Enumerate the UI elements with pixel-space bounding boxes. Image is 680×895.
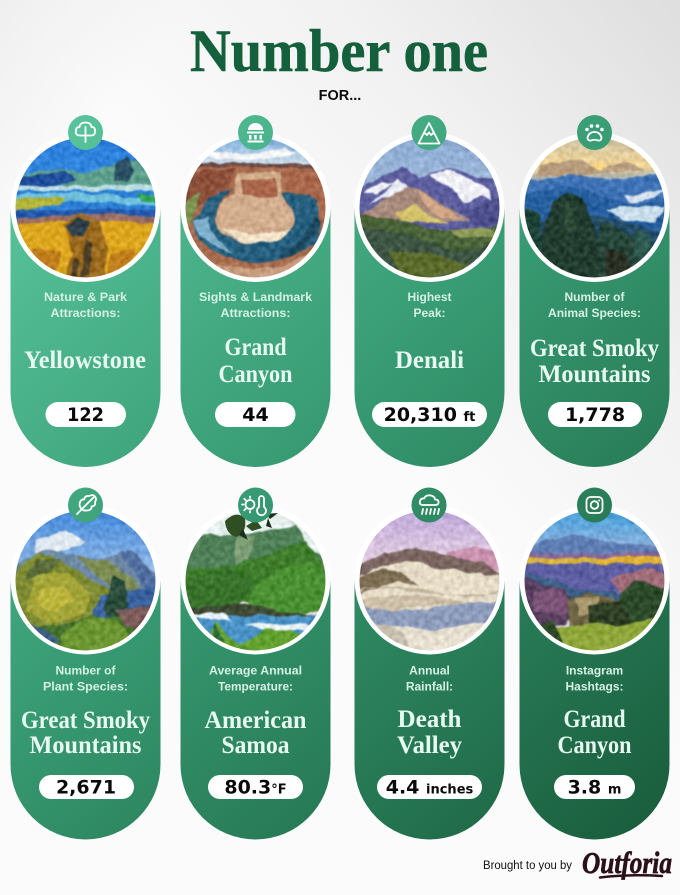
card shape	[10, 207, 161, 467]
value pill	[208, 775, 303, 799]
name: Mountains	[30, 732, 142, 759]
name: Canyon	[218, 361, 293, 388]
icon: landmark	[238, 115, 273, 150]
photo: Grand Canyon north rim	[522, 508, 666, 652]
photo: Smoky Mountains animals	[522, 136, 666, 280]
icon: instagram	[577, 488, 612, 522]
photo: Yellowstone	[14, 136, 158, 280]
label: Peak:	[413, 306, 446, 320]
value pill	[554, 775, 635, 799]
photo: overhanging leaves	[225, 513, 278, 540]
icon: paw	[577, 115, 612, 150]
label: Instagram	[566, 664, 623, 678]
label: Highest	[407, 290, 452, 304]
card shape	[180, 580, 330, 840]
card shape	[354, 580, 504, 840]
value pill	[548, 402, 642, 427]
icon: temperature	[238, 488, 273, 522]
label: Attractions:	[50, 306, 120, 320]
name: Samoa	[222, 732, 290, 759]
label: Annual	[409, 664, 450, 678]
panel: instagram hashtags	[520, 488, 670, 840]
photo ring	[520, 132, 670, 282]
value pill: 44	[242, 404, 269, 426]
value pill: 4.4 inches	[386, 776, 474, 798]
icon: rain cloud	[412, 488, 446, 522]
panel: number of plant species	[10, 488, 161, 840]
value pill	[39, 775, 134, 799]
value pill	[46, 402, 126, 427]
icon: mountain	[412, 115, 446, 150]
name: Yellowstone	[24, 347, 146, 374]
photo ring	[180, 504, 330, 654]
name: Death	[398, 706, 462, 733]
icon: leaf	[68, 488, 103, 522]
value pill: 20,310 ft	[384, 404, 475, 426]
photo: Denali	[358, 136, 502, 280]
card shape	[354, 207, 504, 467]
value pill: 2,671	[56, 776, 116, 798]
label: Attractions:	[220, 306, 290, 320]
photo ring	[520, 504, 670, 654]
name: Grand	[224, 334, 287, 361]
credit text: Brought to you by	[483, 860, 572, 872]
photo ring	[354, 132, 504, 282]
name: Denali	[395, 347, 464, 374]
label: Average Annual	[209, 664, 302, 678]
photo: American Samoa	[184, 508, 328, 652]
label: Rainfall:	[406, 680, 453, 694]
photo: Death Valley	[358, 508, 503, 652]
label: Number of	[564, 290, 626, 304]
label: Sights & Landmark	[199, 290, 312, 304]
name: Canyon	[558, 732, 632, 759]
label: Hashtags:	[565, 680, 624, 694]
name: American	[204, 707, 307, 734]
label: Number of	[56, 664, 117, 678]
panel: annual rainfall	[354, 488, 504, 840]
panel: sights and landmark attractions	[180, 115, 330, 467]
photo ring	[10, 132, 160, 282]
value pill: 1,778	[565, 404, 625, 426]
label: Animal Species:	[548, 306, 641, 320]
label: Plant Species:	[43, 680, 128, 694]
photo ring	[10, 504, 160, 654]
subtitle: FOR...	[319, 88, 361, 104]
panel: nature and park attractions	[10, 115, 161, 467]
card shape	[180, 207, 330, 467]
card shape	[520, 207, 670, 467]
value pill: 122	[67, 404, 104, 426]
name: Great Smoky	[530, 335, 659, 362]
label: Temperature:	[218, 680, 293, 694]
name: Valley	[397, 732, 462, 759]
name: Grand	[564, 706, 626, 733]
name: Mountains	[538, 361, 651, 388]
panel: number of animal species	[520, 115, 670, 467]
value pill: 3.8 m	[568, 776, 621, 798]
value pill: 80.3°F	[224, 776, 287, 798]
value pill	[215, 402, 296, 427]
panel: highest peak	[354, 115, 504, 467]
name: Great Smoky	[21, 707, 150, 734]
photo: Smoky Mountains plants	[14, 508, 158, 652]
photo ring	[354, 504, 504, 654]
title: Number one	[190, 18, 488, 84]
label: Nature & Park	[44, 290, 127, 304]
photo: Horseshoe Bend	[184, 136, 328, 280]
card shape	[10, 580, 161, 840]
panel: average annual temperature	[180, 488, 330, 840]
icon: tree	[68, 115, 103, 150]
photo ring	[180, 132, 330, 282]
card shape	[520, 580, 670, 840]
